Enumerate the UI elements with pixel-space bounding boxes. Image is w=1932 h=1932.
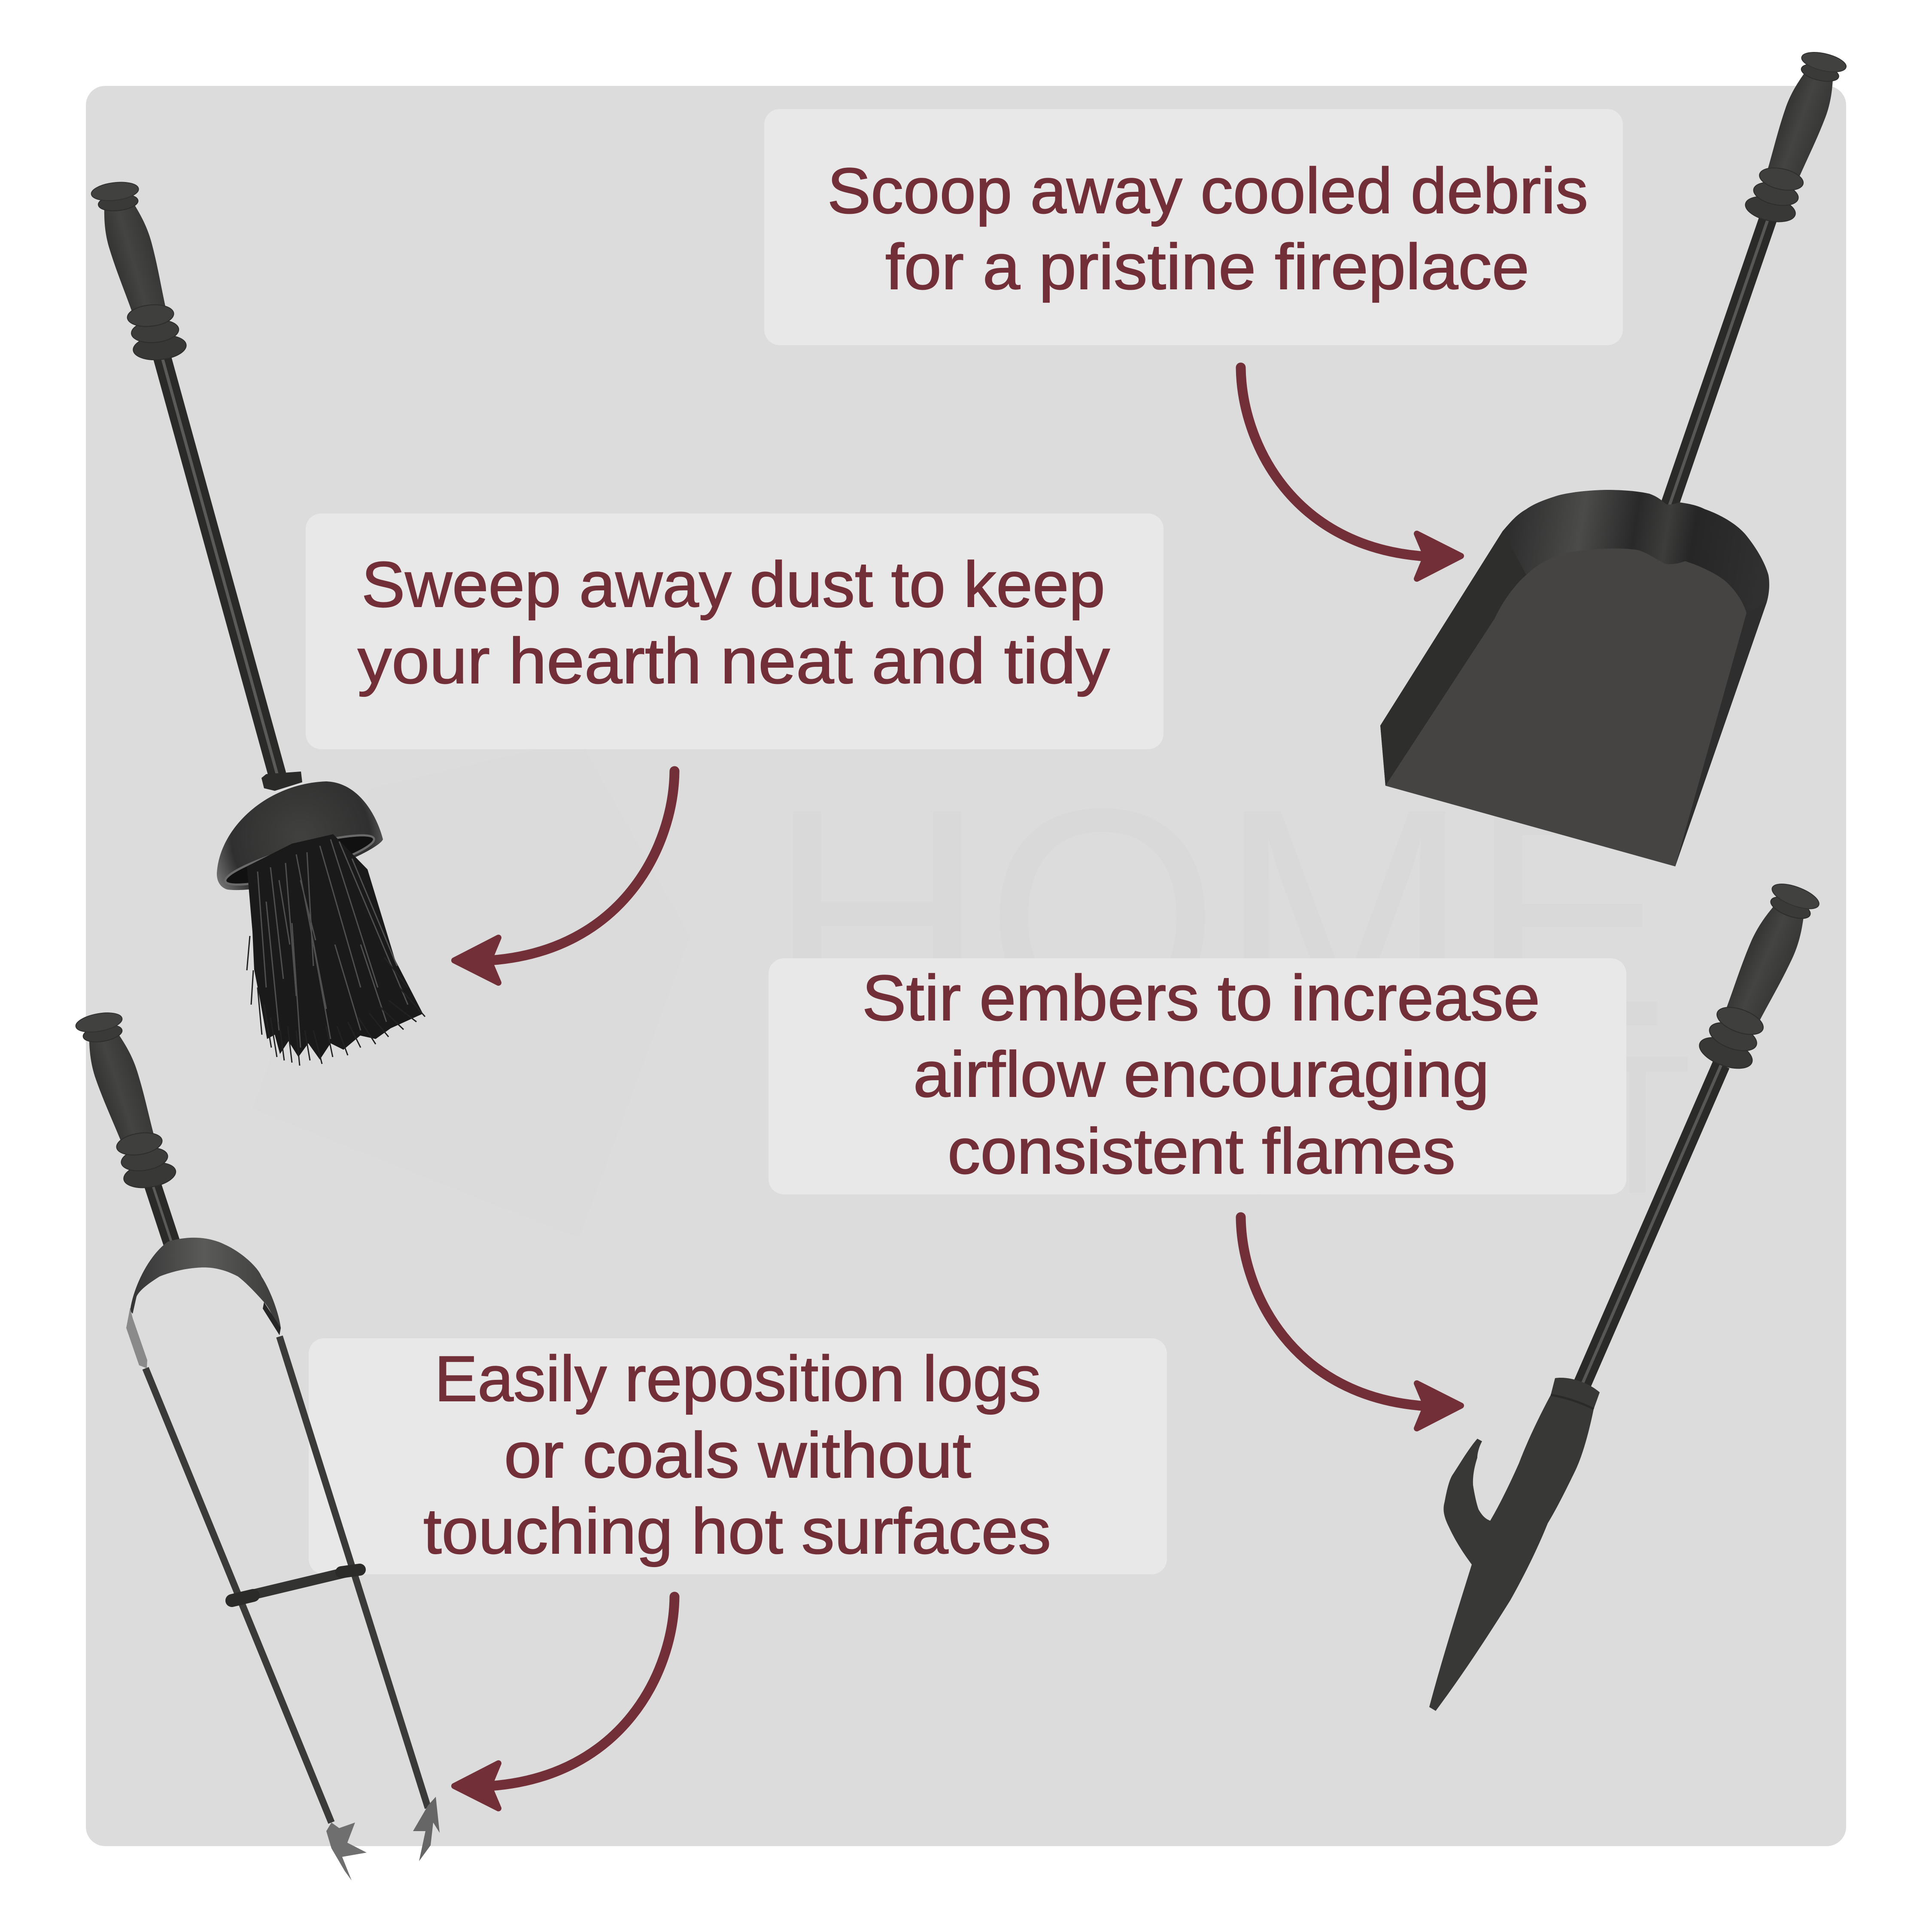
poker head: [1429, 1378, 1600, 1711]
brush rod: [162, 356, 277, 775]
tongs handle: [70, 1009, 179, 1192]
text: poker description: consistent flames: [948, 1115, 1455, 1187]
panel: tongs callout: [309, 1338, 1167, 1574]
tongs right arm: [279, 1337, 428, 1808]
arrow: to tongs: [454, 1597, 674, 1808]
brush bristles: [247, 834, 425, 1066]
text: scoop description: Scoop away cooled debris: [827, 155, 1588, 227]
watermark: DISCOUNT: [769, 1015, 1692, 1235]
tongs left claw: [326, 1823, 367, 1880]
text: poker description: Stir embers to increase: [862, 962, 1540, 1034]
arrow: to shovel: [1241, 368, 1461, 579]
arrow: to brush: [454, 771, 674, 983]
panel: scoop callout: [764, 109, 1623, 345]
panel: poker callout: [769, 958, 1626, 1194]
shovel scoop: [1380, 490, 1769, 866]
text: brush description: Sweep away dust to keep: [361, 548, 1105, 620]
tool: shovel: [1380, 48, 1851, 866]
watermark house: [252, 739, 690, 1238]
watermark: HOME: [769, 744, 1670, 1091]
text: brush description: your hearth neat and tidy: [358, 625, 1110, 697]
text: tongs description: touching hot surfaces: [423, 1495, 1051, 1567]
tongs strap: [130, 1238, 281, 1333]
text: poker description: airflow encouraging: [913, 1038, 1489, 1110]
tool: tongs: [70, 1009, 440, 1880]
brush handle: [86, 179, 189, 363]
tongs left tab: [126, 1308, 147, 1368]
brush dome: [217, 781, 383, 893]
text: scoop description: for a pristine fireplace: [885, 231, 1529, 303]
shovel handle: [1742, 48, 1851, 226]
poker handle: [1695, 878, 1825, 1075]
arrow: to poker: [1241, 1217, 1461, 1428]
tool: brush: [86, 179, 425, 1066]
panel: brush callout: [306, 513, 1163, 749]
tongs cross bar: [232, 1570, 360, 1601]
tongs left arm: [146, 1368, 331, 1823]
shovel rod: [1668, 219, 1768, 511]
poker rod: [1583, 1065, 1721, 1383]
tongs right tab: [263, 1302, 281, 1335]
text: tongs description: Easily reposition logs: [434, 1343, 1041, 1415]
tool: poker: [1429, 878, 1825, 1711]
tongs right claw: [413, 1797, 440, 1861]
text: tongs description: or coals without: [504, 1419, 971, 1491]
tongs rod: [152, 1183, 172, 1243]
brush collar: [261, 772, 302, 791]
